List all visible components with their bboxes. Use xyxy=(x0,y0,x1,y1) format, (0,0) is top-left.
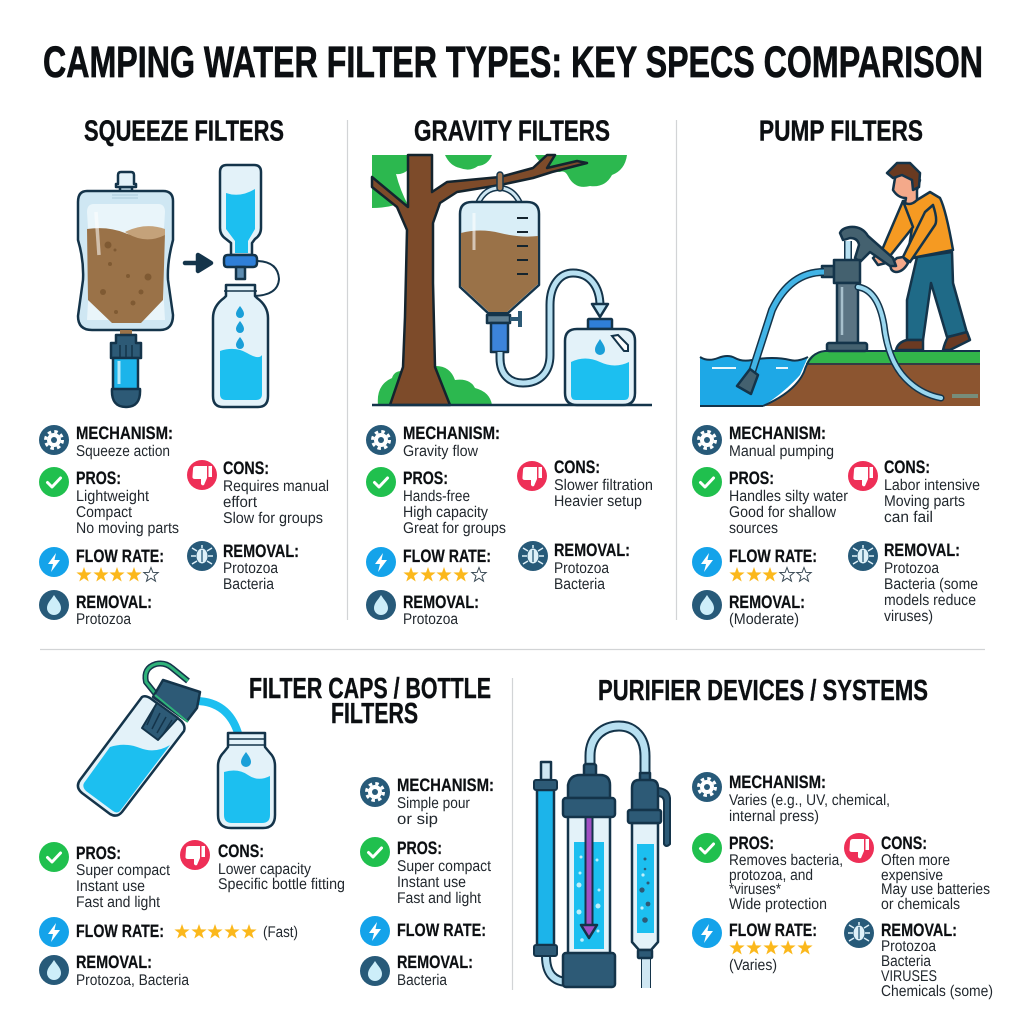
panel: squeeze filters xyxy=(39,116,329,628)
spec: removal organisms: Protozoa xyxy=(881,938,936,955)
spec: mechanism xyxy=(692,423,834,460)
spec: removal organisms xyxy=(187,541,299,593)
spec: cons: Often more xyxy=(881,852,950,869)
spec: flow rate xyxy=(692,918,817,974)
spec: cons xyxy=(517,457,653,510)
illustration: squeeze pouch and bottles xyxy=(78,165,279,407)
panel: gravity filters xyxy=(366,116,653,628)
spec: pros: Instant use xyxy=(76,878,145,895)
spec: pros, right column: PROS: xyxy=(397,838,442,858)
spec: removal organisms: REMOVAL: xyxy=(881,920,957,940)
heading: filter caps: FILTER CAPS / BOTTLE xyxy=(249,673,491,705)
spec: flow rate xyxy=(366,546,491,582)
spec: pros: Great for groups xyxy=(403,520,506,537)
spec: pros, right column: Super compact xyxy=(397,858,492,875)
spec: cons: Requires manual xyxy=(223,478,329,495)
spec: pros: sources xyxy=(729,520,778,537)
spec: pros: High capacity xyxy=(403,504,488,521)
spec: pros: PROS: xyxy=(76,843,121,863)
spec: cons: May use batteries xyxy=(881,881,990,898)
arrow xyxy=(185,255,211,271)
spec: cons: CONS: xyxy=(884,457,930,477)
spec: removal organisms: Bacteria xyxy=(223,576,274,593)
spec: removal: Protozoa, Bacteria xyxy=(76,972,189,989)
spec: pros: Removes bacteria, xyxy=(729,852,843,869)
spec: cons: Slow for groups xyxy=(223,510,323,527)
spec: flow rate xyxy=(39,917,298,947)
spec: mechanism xyxy=(692,772,890,825)
spec: flow rate, right column xyxy=(360,916,486,946)
spec: pros xyxy=(39,467,179,537)
spec: pros xyxy=(692,467,848,537)
spec: pros: *viruses* xyxy=(729,881,781,898)
spec: flow rate: FLOW RATE: xyxy=(76,546,164,566)
spec: removal xyxy=(692,590,805,628)
panel: pump filters xyxy=(692,116,980,628)
spec: mechanism xyxy=(39,423,173,460)
spec: mechanism, right column: or sip xyxy=(397,811,438,828)
spec: removal organisms: Chemicals (some) xyxy=(881,983,993,1000)
spec: pros xyxy=(39,842,171,911)
spec: removal xyxy=(366,590,479,628)
spec: removal organisms: Protozoa xyxy=(884,560,939,577)
spec: cons: CONS: xyxy=(881,833,927,853)
spec: cons: Lower capacity xyxy=(218,861,311,878)
spec: cons: effort xyxy=(223,494,258,511)
spec: removal, right column: REMOVAL: xyxy=(397,952,473,972)
spec: removal organisms: REMOVAL: xyxy=(554,540,630,560)
spec: removal organisms xyxy=(848,540,978,625)
spec: flow rate: (Varies) xyxy=(729,957,777,974)
spec: cons: can fail xyxy=(884,509,933,526)
carry loop xyxy=(145,664,188,697)
spec: flow rate: FLOW RATE: xyxy=(76,921,164,941)
spec: mechanism: MECHANISM: xyxy=(729,423,826,443)
spec: removal: REMOVAL: xyxy=(729,592,805,612)
spec: removal xyxy=(39,952,189,989)
spec: removal organisms: Bacteria xyxy=(881,953,931,970)
person legs xyxy=(907,252,967,340)
spec: removal organisms: REMOVAL: xyxy=(884,540,960,560)
spec: mechanism: MECHANISM: xyxy=(76,423,173,443)
person head xyxy=(893,170,920,204)
spec: removal: Protozoa xyxy=(76,611,131,628)
person torso and arms xyxy=(903,192,953,260)
panel: purifier devices / systems xyxy=(534,675,993,1000)
spec: pros, right column: Instant use xyxy=(397,874,466,891)
spec: mechanism: Varies (e.g., UV, chemical, xyxy=(729,792,890,809)
spec: removal organisms: VIRUSES xyxy=(881,968,937,985)
spec: cons: Slower filtration xyxy=(554,477,653,494)
spec: flow rate: FLOW RATE: xyxy=(729,546,817,566)
spec: removal organisms: Bacteria xyxy=(554,576,605,593)
spec: removal: REMOVAL: xyxy=(76,592,152,612)
spec: pros: PROS: xyxy=(729,468,774,488)
spec: cons: Moving parts xyxy=(884,493,965,510)
spec: removal: REMOVAL: xyxy=(76,952,152,972)
spec: cons: CONS: xyxy=(223,458,269,478)
heading: filter caps xyxy=(249,673,491,730)
panel: filter caps / bottle filters xyxy=(39,664,494,989)
spec: mechanism: MECHANISM: xyxy=(729,772,826,792)
heading: purifier devices: PURIFIER DEVICES / SYSTEMS xyxy=(598,675,928,707)
spec: removal: Protozoa xyxy=(403,611,458,628)
heading: pump filters: PUMP FILTERS xyxy=(759,116,923,148)
spec: pros: protozoa, and xyxy=(729,867,813,884)
spec: mechanism: Manual pumping xyxy=(729,443,834,460)
heading: filter caps: FILTERS xyxy=(331,698,418,730)
spec: pros: Wide protection xyxy=(729,896,827,913)
spec: removal xyxy=(39,590,152,628)
spec: mechanism, right column: Simple pour xyxy=(397,795,470,812)
spec: pros, right column: Fast and light xyxy=(397,890,482,907)
spec: pros: Handles silty water xyxy=(729,488,848,505)
heading: gravity filters: GRAVITY FILTERS xyxy=(414,116,610,148)
spec: cons xyxy=(844,833,990,913)
heading: squeeze filters: SQUEEZE FILTERS xyxy=(84,116,284,148)
spec: flow rate xyxy=(692,546,817,582)
person hands xyxy=(873,250,908,272)
spec: pros, right column xyxy=(360,837,492,907)
spec: flow rate: FLOW RATE: xyxy=(729,920,817,940)
spec: pros: Compact xyxy=(76,504,133,521)
spec: cons: Specific bottle fitting xyxy=(218,876,345,893)
spec: pros: PROS: xyxy=(76,468,121,488)
spec: pros: Fast and light xyxy=(76,894,161,911)
spec: pros: Lightweight xyxy=(76,488,150,505)
spec: removal, right column xyxy=(360,952,473,989)
spec: mechanism: MECHANISM: xyxy=(403,423,500,443)
illustration: tree and gravity bag xyxy=(372,155,652,405)
spec: removal organisms: Protozoa xyxy=(223,560,278,577)
spec: flow rate xyxy=(39,546,164,582)
illustration: person using hand pump xyxy=(700,163,980,406)
spec: removal organisms xyxy=(844,918,993,1000)
spec: pros: Hands-free xyxy=(403,488,470,505)
spec: cons xyxy=(180,840,345,893)
spec: pros: Good for shallow xyxy=(729,504,837,521)
bottle cap xyxy=(153,680,200,721)
spec: cons: or chemicals xyxy=(881,896,960,913)
filter element xyxy=(142,703,178,740)
illustration: tilted bottle pouring into jar xyxy=(78,664,275,828)
spec: cons xyxy=(848,457,980,526)
spec: mechanism: Squeeze action xyxy=(76,443,170,460)
spec: removal organisms: viruses) xyxy=(884,608,933,625)
spec: mechanism, right column xyxy=(360,775,494,828)
spec: removal organisms: REMOVAL: xyxy=(223,541,299,561)
spec: mechanism: Gravity flow xyxy=(403,443,479,460)
spec: pros: PROS: xyxy=(403,468,448,488)
spec: flow rate, right column: FLOW RATE: xyxy=(397,920,486,940)
spec: removal organisms xyxy=(518,540,630,593)
spec: cons: Heavier setup xyxy=(554,493,642,510)
spec: cons: CONS: xyxy=(554,457,600,477)
spec: cons: expensive xyxy=(881,867,943,884)
spec: removal, right column: Bacteria xyxy=(397,972,447,989)
spec: pros: No moving parts xyxy=(76,520,179,537)
spec: cons: CONS: xyxy=(218,841,264,861)
spec: pros: PROS: xyxy=(729,833,774,853)
pump xyxy=(840,227,896,266)
spec: removal: REMOVAL: xyxy=(403,592,479,612)
spec: mechanism, right column: MECHANISM: xyxy=(397,775,494,795)
spec: cons xyxy=(187,458,329,527)
spec: pros: Super compact xyxy=(76,862,171,879)
spec: cons: Labor intensive xyxy=(884,477,980,494)
spec: mechanism: internal press) xyxy=(729,808,819,825)
spec: mechanism xyxy=(366,423,500,460)
spec: removal organisms: Bacteria (some xyxy=(884,576,978,593)
spec: removal organisms: models reduce xyxy=(884,592,976,609)
spec: flow rate: FLOW RATE: xyxy=(403,546,491,566)
spec: removal: (Moderate) xyxy=(729,611,799,628)
spec: flow rate: (Fast) xyxy=(263,924,298,941)
spec: pros xyxy=(692,833,843,913)
illustration: purifier cylinders xyxy=(534,726,670,988)
spec: removal organisms: Protozoa xyxy=(554,560,609,577)
spec: pros xyxy=(366,467,506,537)
